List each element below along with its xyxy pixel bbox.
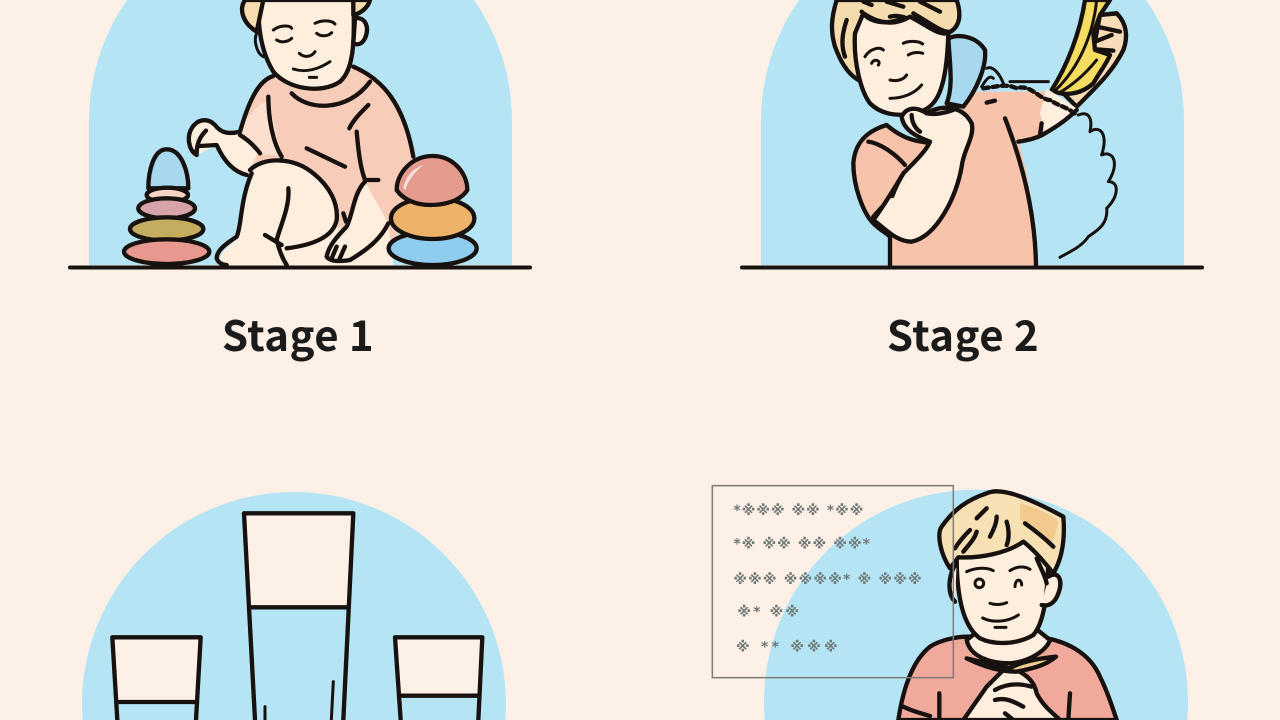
hands and collar [963,669,1060,720]
torso and raised sleeve [853,92,1050,265]
illustration: child with banana phone [832,0,1126,265]
baby left arm and hand [189,120,260,175]
arch backdrop: stage 1 [89,0,512,265]
scribbled text lines [733,503,922,656]
illustration: child reading [712,486,1117,720]
banana [1052,0,1110,94]
circle backdrop: stage 4 [764,490,1188,720]
baby leg [217,160,337,265]
neck patch [887,117,930,142]
baby head [259,0,354,89]
tall middle glass [244,513,353,720]
hair [832,0,959,80]
phone cord [1060,114,1116,257]
baby body [240,67,413,253]
panel: stage 3 [82,492,506,720]
scribbled text lines: ※※※ ※※※※* ※ ※※※ [733,572,922,588]
stacking ring toy: left [124,149,209,264]
left glass [112,637,201,720]
ground line: stage 2 [740,266,1204,270]
scribbled text lines: *※※※ ※※ *※※ [733,503,863,519]
hair [939,491,1064,573]
shirt [898,637,1117,720]
circle backdrop: stage 3 [82,492,506,720]
paper with scribbled text [712,486,953,678]
sleeve outline [853,125,905,237]
panel: stage 1 [68,0,532,364]
label: stage 2: Stage 2 [887,303,1039,364]
ground line: stage 1 [68,266,532,270]
scribbled text lines: ※* ※※ [737,605,799,621]
telephone handset [947,36,985,107]
hand holding banana [1063,13,1126,107]
stacking ring toy: right [389,156,477,265]
ragged wrist texture [983,86,1077,115]
face [865,41,923,98]
illustration: three glasses conservation task [112,513,482,720]
face [967,567,1030,627]
head [957,530,1048,643]
head [855,13,948,115]
right glass [395,637,482,720]
hand on chin and forearm [873,108,972,242]
scribbled text lines: ※ ** ※※※ [736,640,838,656]
panel: stage 2 [740,0,1204,364]
baby right arm [327,182,388,261]
arch backdrop: stage 2 [761,0,1184,265]
panel: stage 4 [712,486,1188,720]
illustration: baby playing with stacking rings [124,0,477,265]
scribbled text lines: *※ ※※ ※※ ※※* [733,536,871,552]
label: stage 1: Stage 1 [222,303,374,364]
baby face [273,21,335,77]
